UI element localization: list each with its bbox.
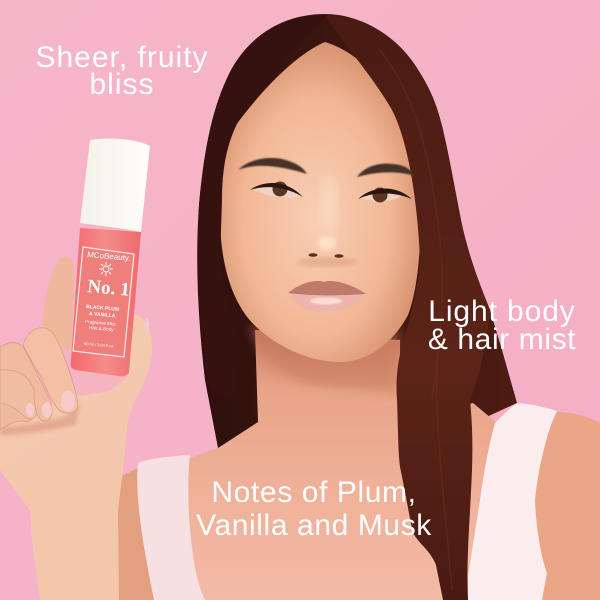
forearm and hand <box>0 315 152 600</box>
callout: sheer fruity bliss: Sheer, fruity <box>35 41 209 74</box>
nose <box>297 175 357 267</box>
callout: notes of plum vanilla musk: Vanilla and Musk <box>196 509 432 542</box>
hair highlight strands <box>216 30 452 590</box>
finger one <box>23 328 78 413</box>
label: & VANILLA <box>89 311 116 319</box>
right eye <box>358 188 412 202</box>
face <box>220 42 420 362</box>
left tank strap <box>137 455 205 600</box>
index finger behind bottle <box>42 257 74 350</box>
fingernails <box>26 318 149 418</box>
bottle cap <box>80 138 150 232</box>
hair front strand right <box>326 16 490 600</box>
right eyebrow <box>357 164 414 177</box>
callout: light body and hair mist: & hair mist <box>428 323 576 356</box>
neck shadow <box>250 325 400 395</box>
callout: notes of plum vanilla musk: Notes of Plum, <box>211 476 417 509</box>
label: Hair & Body <box>89 325 114 332</box>
bottle body <box>71 228 141 376</box>
left eye <box>250 182 303 198</box>
gap under bottle <box>74 370 128 396</box>
right shoulder <box>530 412 600 600</box>
left shoulder <box>118 468 156 600</box>
finger four <box>0 403 32 430</box>
sun icon <box>99 262 113 276</box>
hair front strand left <box>198 16 326 400</box>
product type: Fragrance Mist <box>85 319 117 327</box>
volume: 90 ml / 3.04 fl oz <box>84 341 114 349</box>
brand: MCoBeauty. <box>87 250 131 263</box>
product name: BLACK PLUM <box>86 304 119 313</box>
finger two <box>0 342 52 421</box>
finger shadow <box>0 404 80 436</box>
label <box>73 247 134 357</box>
product number: No. 1 <box>87 276 130 301</box>
perfume bottle <box>42 138 150 396</box>
callout: sheer fruity bliss: bliss <box>89 68 155 101</box>
right tank strap <box>468 403 557 600</box>
torso and chest <box>140 330 497 600</box>
callout: light body and hair mist: Light body <box>428 295 576 328</box>
fingers <box>0 318 149 436</box>
finger three <box>0 370 37 419</box>
lips <box>288 281 366 312</box>
left eyebrow <box>238 158 307 174</box>
hair back <box>197 14 517 600</box>
